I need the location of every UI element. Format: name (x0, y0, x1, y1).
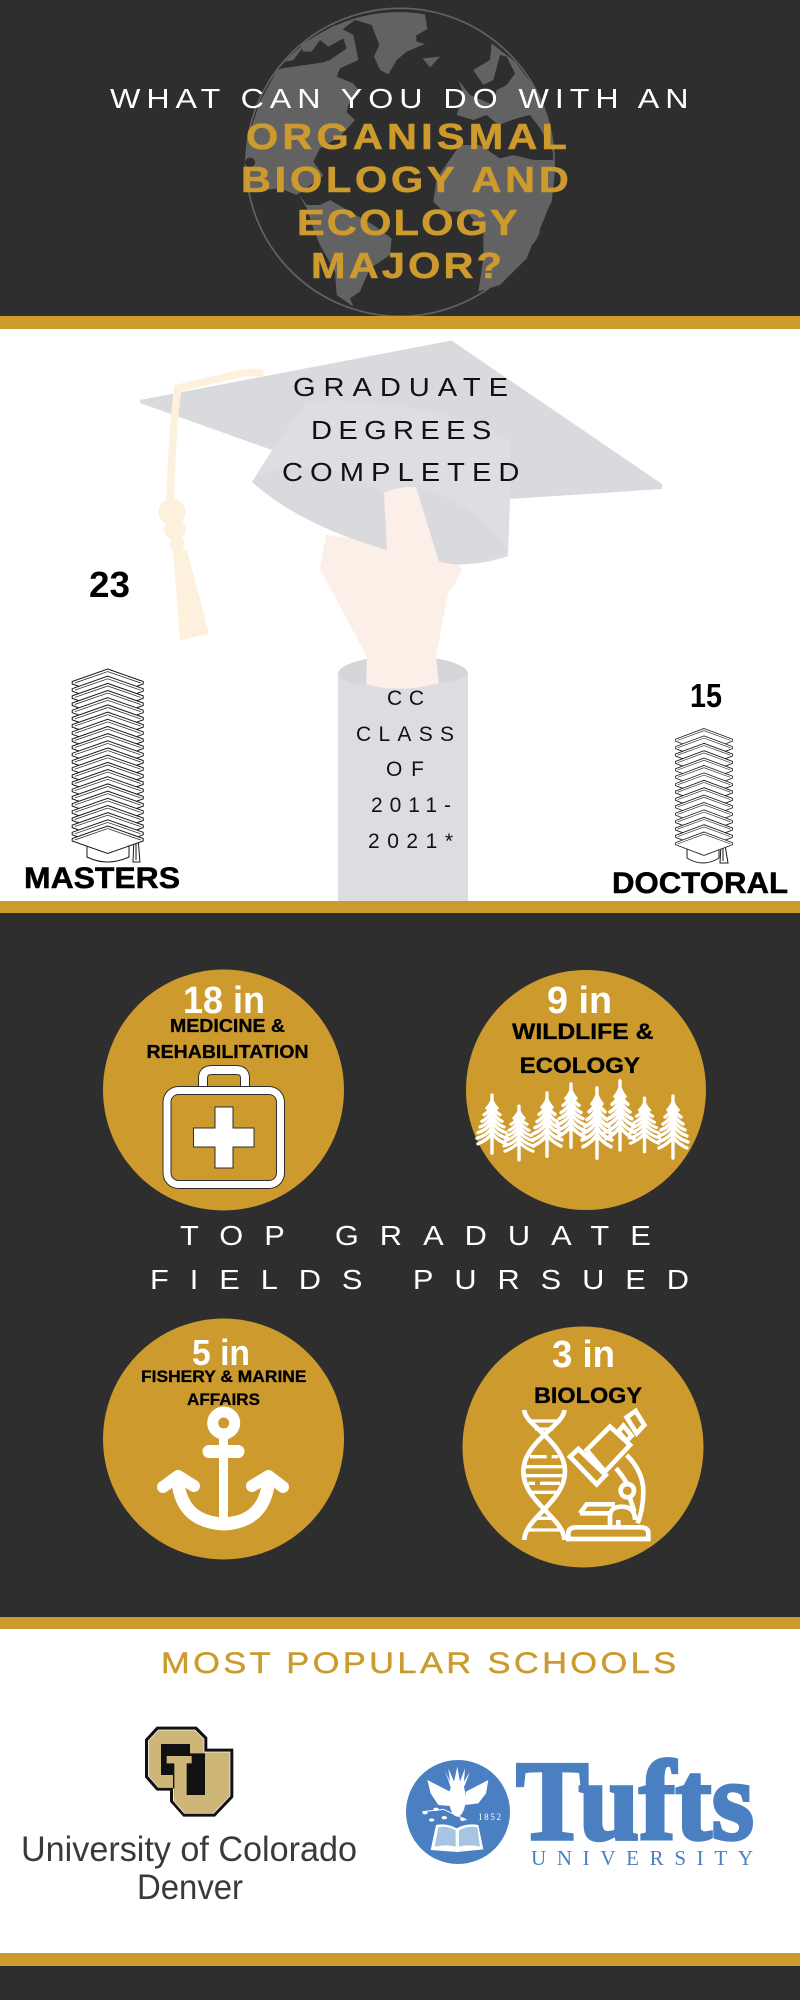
section heading (150, 1220, 689, 1296)
sleeve label: OF (386, 758, 424, 781)
field: wildlife and ecology (466, 970, 706, 1210)
illustration: hand holding graduation cap (140, 340, 662, 902)
field: fishery and marine: AFFAIRS (187, 1390, 260, 1409)
field: biology: BIOLOGY (534, 1383, 642, 1408)
icon: DNA and microscope (523, 1410, 648, 1540)
field: wildlife and ecology: ECOLOGY (520, 1053, 640, 1078)
sleeve label: 2011- (371, 794, 451, 817)
logo: Tufts University (406, 1739, 754, 1870)
logo: University of Colorado Denver (21, 1727, 357, 1907)
intro line: WHAT CAN YOU DO WITH AN (110, 84, 688, 114)
wordmark: Tufts (516, 1739, 754, 1864)
title: BIOLOGY AND (241, 160, 569, 200)
icon: stack of 15 caps (676, 728, 732, 863)
logo: University of Colorado Denver: University of Colorado (21, 1830, 357, 1869)
section heading: GRADUATE (293, 372, 508, 402)
seal (406, 1760, 510, 1864)
section heading: TOP GRADUATE (180, 1220, 651, 1252)
field: biology: 3 in (552, 1334, 615, 1376)
sleeve label: 2021* (368, 830, 453, 853)
sleeve label: CLASS (356, 723, 454, 746)
title (241, 117, 569, 286)
icon: first aid kit (162, 1070, 285, 1189)
field: biology (462, 1326, 704, 1568)
field: wildlife and ecology: 9 in (547, 980, 612, 1022)
icon: globe (245, 8, 555, 316)
field: medicine: REHABILITATION (146, 1042, 308, 1062)
field: medicine: 18 in (183, 980, 265, 1022)
panel: graduate degrees (0, 329, 800, 902)
section heading: FIELDS PURSUED (150, 1264, 689, 1296)
logo: University of Colorado Denver: Denver (137, 1868, 243, 1907)
section heading: COMPLETED (282, 457, 519, 487)
panel: header (110, 8, 688, 316)
seal: 1852 (478, 1812, 501, 1822)
icon: pine trees (477, 1081, 688, 1160)
icon: stack of 23 caps (72, 669, 143, 862)
title: ORGANISMAL (246, 117, 567, 157)
field: fishery and marine: FISHERY & MARINE (141, 1367, 306, 1386)
title: ECOLOGY (297, 203, 518, 243)
sleeve label (356, 687, 454, 853)
section heading: DEGREES (311, 415, 491, 445)
sleeve label: CC (387, 687, 424, 710)
field: medicine: MEDICINE & (170, 1016, 285, 1036)
university line: UNIVERSITY (531, 1846, 753, 1870)
section heading: MOST POPULAR SCHOOLS (161, 1646, 676, 1679)
masters count: 23 (89, 564, 130, 605)
icon: anchor (163, 1412, 283, 1524)
panel: most popular schools (0, 1628, 800, 1953)
field: medicine (103, 970, 344, 1210)
panel: top graduate fields (103, 970, 706, 1568)
field: wildlife and ecology: WILDLIFE & (512, 1019, 654, 1044)
section heading (282, 372, 519, 487)
field: fishery and marine (103, 1318, 344, 1560)
title: MAJOR? (311, 246, 502, 286)
doctoral label: DOCTORAL (612, 867, 788, 900)
masters label: MASTERS (24, 862, 180, 895)
field: fishery and marine: 5 in (192, 1332, 250, 1373)
doctoral count: 15 (690, 677, 722, 714)
